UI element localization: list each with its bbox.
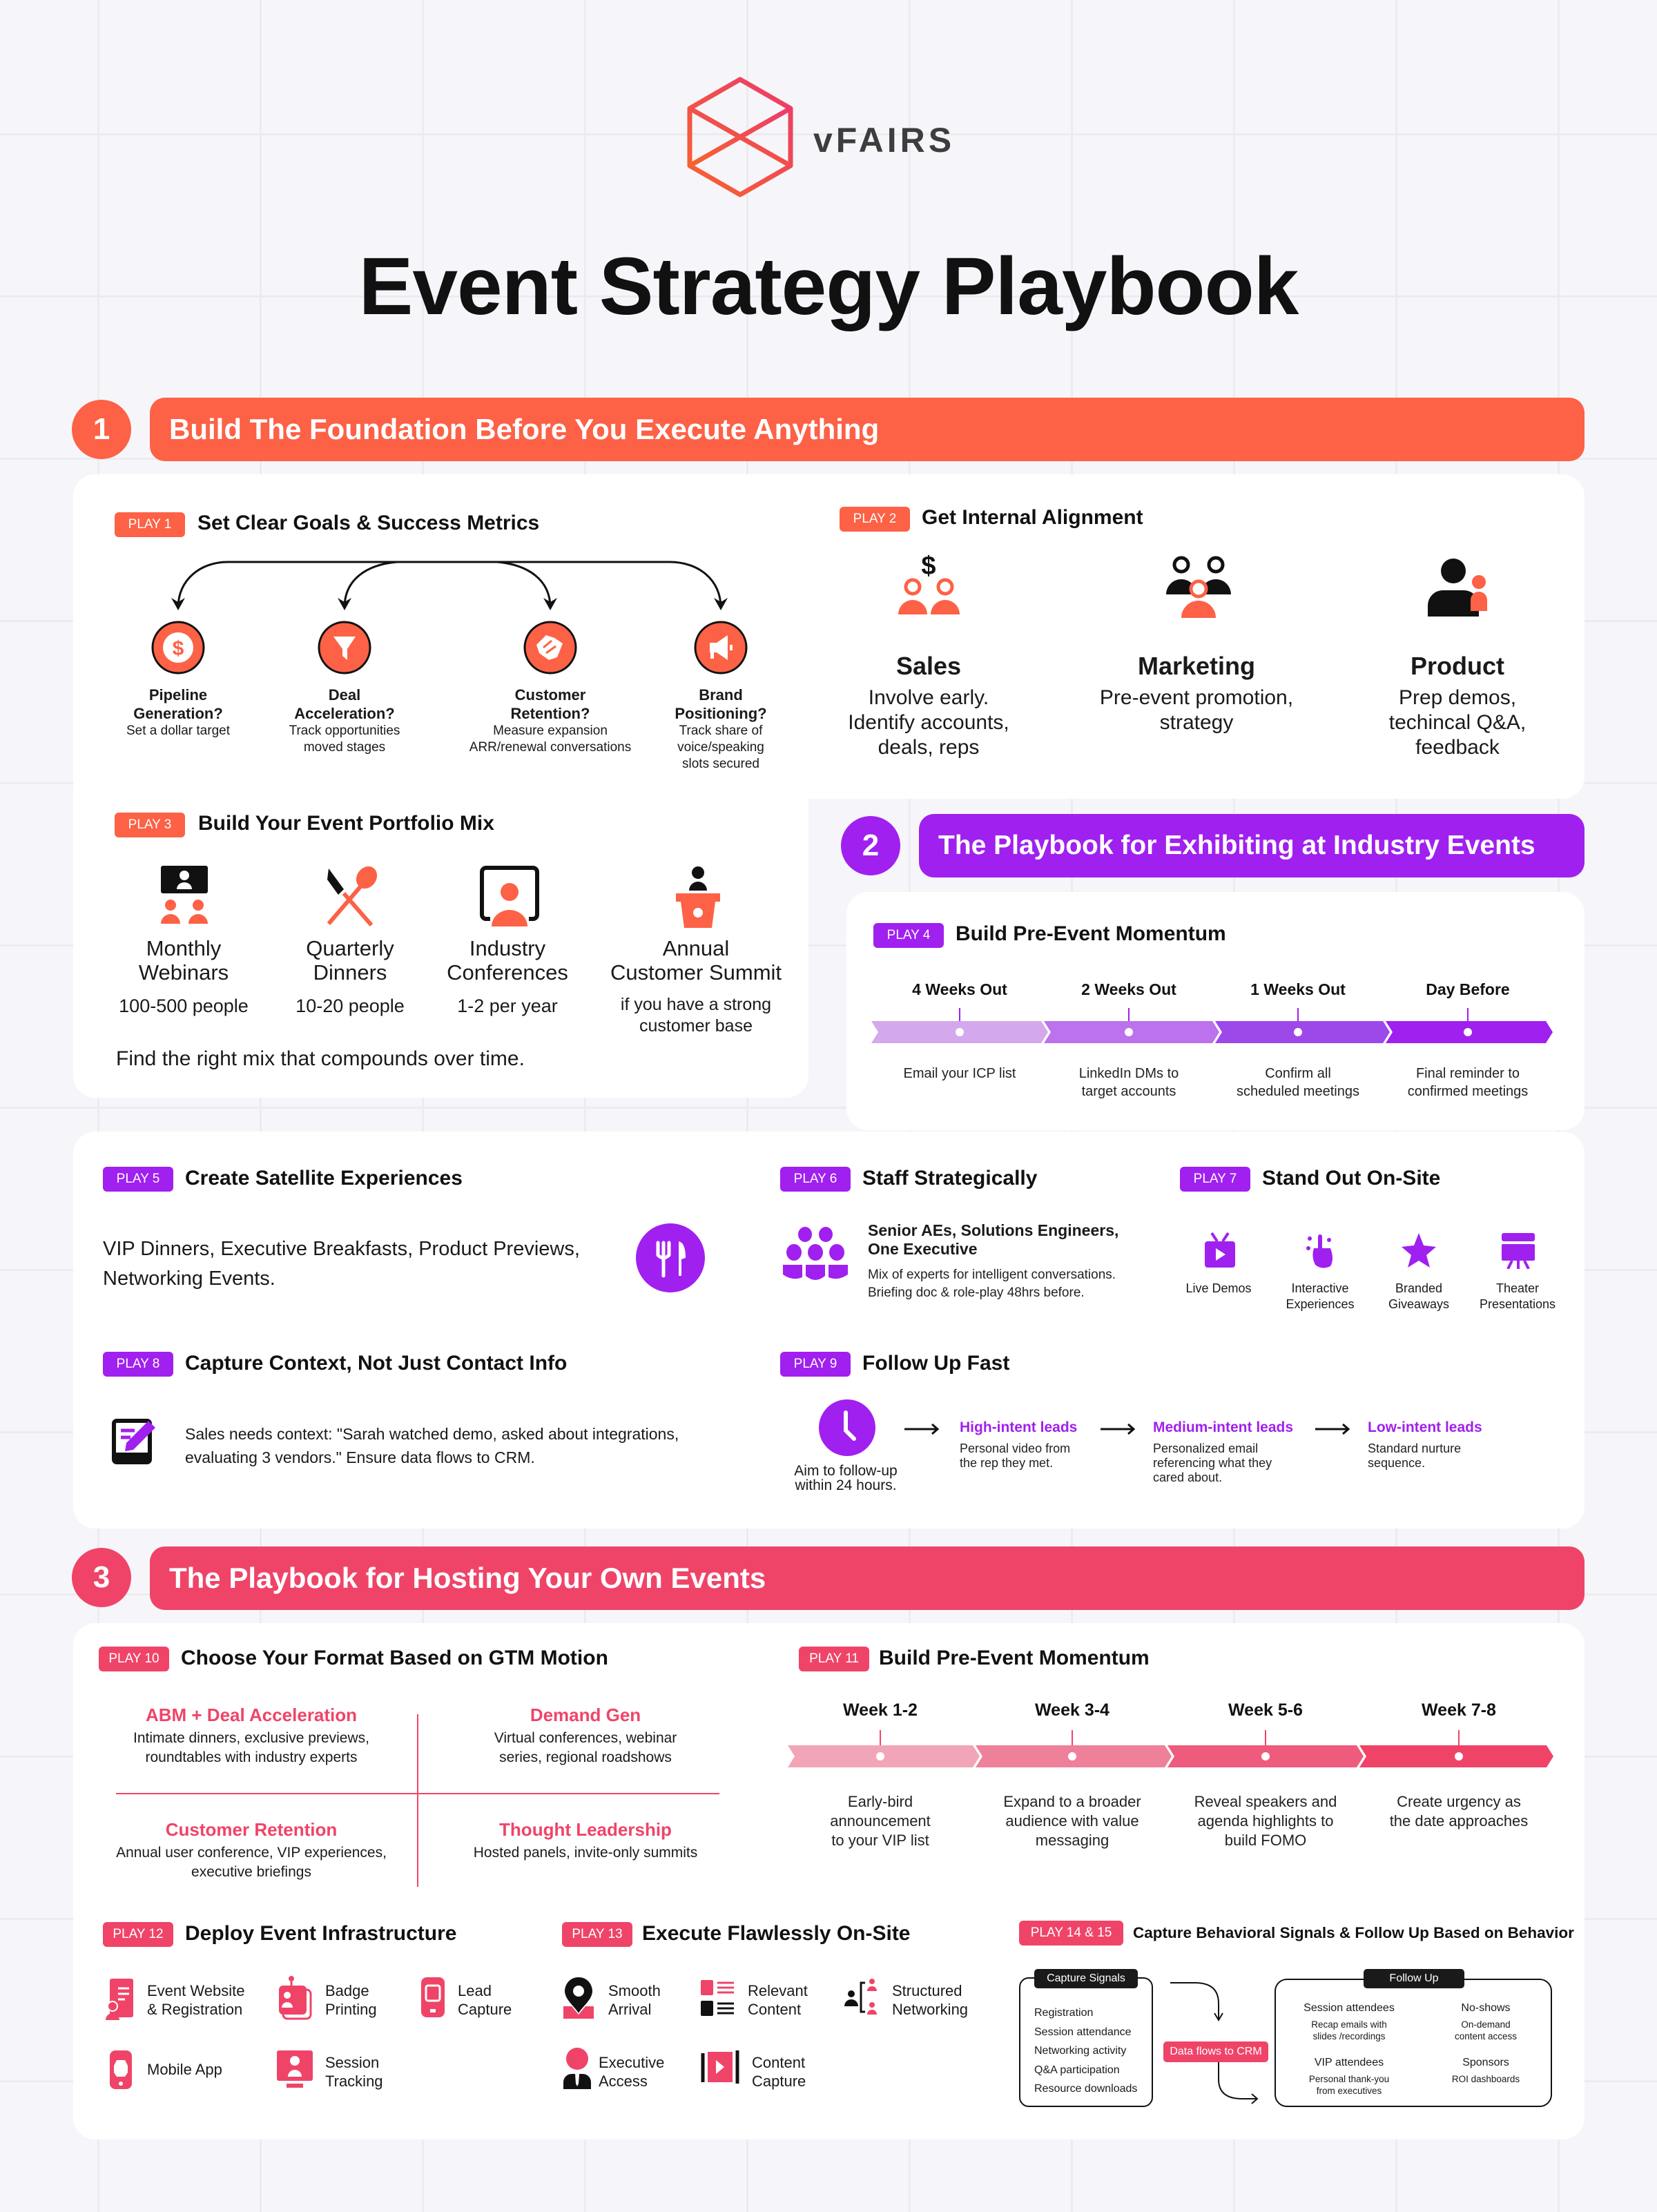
play 8: PLAY 8	[117, 1357, 159, 1371]
timeline: build FOMO	[1225, 1832, 1306, 1849]
capture signals box: Resource downloads	[1034, 2083, 1137, 2095]
play 7: Interactive	[1291, 1281, 1349, 1295]
follow up box: Personal thank-you	[1309, 2074, 1389, 2084]
follow up box: from executives	[1317, 2086, 1382, 2096]
section 3 header: The Playbook for Hosting Your Own Events	[169, 1562, 766, 1594]
play 3: 10-20 people	[295, 996, 405, 1016]
mix note: Find the right mix that compounds over time.	[116, 1047, 525, 1070]
play 10: executive briefings	[191, 1864, 311, 1880]
play 7: Theater	[1496, 1281, 1539, 1295]
play 10: Annual user conference, VIP experiences,	[116, 1845, 387, 1861]
icon: interactive	[1306, 1234, 1333, 1268]
goal labels	[126, 686, 230, 738]
play 11: PLAY 11	[809, 1651, 859, 1666]
play 7: Live Demos	[1185, 1281, 1252, 1295]
icon: star	[1402, 1233, 1436, 1268]
timeline: 1 Weeks Out	[1250, 980, 1346, 998]
timeline: 4 Weeks Out	[912, 980, 1007, 998]
follow up box: No-shows	[1461, 2002, 1511, 2014]
icon: badge	[276, 1975, 313, 2020]
play 13: Arrival	[608, 2001, 651, 2018]
play 9: Personalized email	[1153, 1442, 1258, 1455]
data flow arrows	[1161, 1976, 1278, 2107]
play 10: ABM + Deal Acceleration	[146, 1705, 357, 1725]
icon: location	[562, 1976, 595, 2020]
icon: lead capture	[419, 1976, 447, 2019]
section 3 header	[72, 1546, 1585, 1610]
play 12: Capture	[458, 2001, 512, 2018]
sales text: deals, reps	[878, 736, 979, 759]
marketing text: Marketing	[1138, 652, 1255, 680]
play 9: referencing what they	[1153, 1456, 1272, 1470]
play 9: Medium-intent leads	[1153, 1419, 1293, 1435]
play 13: Relevant	[748, 1982, 808, 1999]
play 14 & 15	[1019, 1921, 1571, 2135]
icon: team	[783, 1227, 848, 1280]
play 3: Build Your Event Portfolio Mix	[198, 812, 494, 835]
play 5: PLAY 5	[117, 1172, 159, 1186]
capture signals box: Capture Signals	[1047, 1972, 1125, 1984]
panel: play 4: PLAY 4	[887, 928, 930, 942]
play 12: Deploy Event Infrastructure	[185, 1922, 456, 1945]
icon: clock	[819, 1399, 875, 1456]
play 5: Networking Events.	[103, 1268, 275, 1290]
icon: product	[1428, 559, 1487, 617]
play 7: Stand Out On-Site	[1262, 1167, 1440, 1190]
timeline: Expand to a broader	[1003, 1793, 1141, 1810]
timeline: Week 3-4	[1035, 1700, 1109, 1720]
play 12: Tracking	[325, 2073, 383, 2090]
play 1: Positioning?	[675, 705, 767, 722]
play 1	[115, 512, 767, 771]
play 1: Retention?	[511, 705, 590, 722]
panel: play 4: Build Pre-Event Momentum	[956, 922, 1226, 945]
play 9: cared about.	[1153, 1471, 1222, 1484]
icon: handshake	[523, 621, 577, 674]
play 8: Sales needs context: "Sarah watched demo, asked about integrations,	[185, 1425, 679, 1443]
panel: play 4	[846, 892, 1585, 1130]
play 12: Printing	[325, 2001, 377, 2018]
timeline	[871, 980, 1553, 1099]
timeline: audience with value	[1005, 1812, 1139, 1830]
section 1 header: Build The Foundation Before You Execute Anything	[169, 413, 879, 445]
play 9	[780, 1352, 1482, 1493]
icon: funnel	[318, 621, 371, 674]
play 10: Intimate dinners, exclusive previews,	[133, 1730, 369, 1746]
play 13: Execute Flawlessly On-Site	[642, 1922, 910, 1945]
play 1: Track opportunities	[289, 724, 400, 738]
icon: executive	[562, 2046, 592, 2090]
play 3: if you have a strong	[621, 995, 771, 1014]
section 2 header: 2	[862, 828, 879, 862]
logo: vFAIRS	[813, 121, 955, 159]
play 3: customer base	[639, 1016, 753, 1036]
timeline: LinkedIn DMs to	[1079, 1066, 1179, 1081]
play 12: Event Website	[147, 1982, 244, 1999]
play 9: within 24 hours.	[795, 1477, 897, 1493]
play 13	[562, 1922, 1004, 2129]
arrows	[904, 1424, 1350, 1435]
play 10: series, regional roadshows	[499, 1749, 672, 1765]
icon: sales	[898, 552, 960, 614]
CRM tag	[1163, 2041, 1268, 2062]
section 2 header	[841, 814, 1585, 877]
timeline: target accounts	[1082, 1084, 1176, 1099]
section 3 header: 3	[93, 1560, 110, 1594]
play 13: Structured	[892, 1982, 962, 1999]
play 10: roundtables with industry experts	[145, 1749, 358, 1765]
play 5: Create Satellite Experiences	[185, 1167, 463, 1190]
play 7: Presentations	[1480, 1297, 1556, 1311]
icon: theater	[1502, 1233, 1535, 1269]
timeline: Create urgency as	[1397, 1793, 1521, 1810]
play 9: Low-intent leads	[1368, 1419, 1482, 1435]
play 14 & 15: Follow Up	[1389, 1972, 1439, 1984]
play 2: Get Internal Alignment	[922, 506, 1143, 529]
play 2: PLAY 2	[853, 512, 896, 526]
product text: Product	[1411, 652, 1504, 680]
play 13: Content	[748, 2001, 801, 2018]
play 9: Follow Up Fast	[862, 1352, 1009, 1375]
play 12: Badge	[325, 1982, 369, 1999]
play 10: Thought Leadership	[499, 1819, 672, 1840]
play 3: Industry	[469, 936, 545, 960]
timeline: confirmed meetings	[1408, 1084, 1528, 1099]
play 12	[103, 1922, 531, 2129]
play 1: Deal	[329, 686, 360, 704]
icon: conference	[480, 866, 539, 926]
timeline: Week 7-8	[1422, 1700, 1496, 1720]
timeline: Email your ICP list	[903, 1066, 1016, 1081]
play 5	[103, 1167, 705, 1292]
play 13: Content	[752, 2054, 805, 2071]
panel: exhibiting plays	[73, 1132, 1585, 1529]
play 10	[99, 1647, 719, 1887]
play 1: Customer	[515, 686, 585, 704]
portfolio labels: Webinars	[139, 960, 229, 984]
play 3: Dinners	[313, 960, 387, 984]
play 1: Track share of	[679, 724, 762, 738]
play 8	[103, 1352, 679, 1466]
icon: content list	[701, 1980, 735, 2016]
play 1: Set Clear Goals & Success Metrics	[197, 512, 539, 534]
icon: sales: $	[921, 552, 936, 581]
play 6: Staff Strategically	[862, 1167, 1037, 1190]
play 9: sequence.	[1368, 1456, 1425, 1470]
capture signals box: Session attendance	[1034, 2026, 1132, 2038]
follow up box: content access	[1455, 2031, 1517, 2041]
play 7: Experiences	[1286, 1297, 1355, 1311]
play 7: Branded	[1395, 1281, 1442, 1295]
play 13: Executive	[599, 2054, 664, 2071]
play 10: PLAY 10	[108, 1651, 159, 1666]
product text: Prep demos,	[1399, 686, 1516, 709]
play 5: VIP Dinners, Executive Breakfasts, Product Previews,	[103, 1238, 580, 1260]
icon: fork knife	[636, 1223, 705, 1292]
follow up box: Recap emails with	[1311, 2019, 1387, 2030]
icon: webinar	[161, 866, 208, 924]
sales text: Identify accounts,	[848, 711, 1009, 734]
play 9: Standard nurture	[1368, 1442, 1461, 1455]
follow up box: slides /recordings	[1312, 2031, 1386, 2041]
marketing text: strategy	[1160, 711, 1233, 734]
goal labels: Generation?	[133, 705, 223, 722]
play 9: Aim to follow-up	[794, 1463, 898, 1479]
follow up box: ROI dashboards	[1452, 2074, 1520, 2084]
section 1 header: 1	[93, 412, 110, 446]
play 13: Smooth	[608, 1982, 661, 1999]
timeline: 2 Weeks Out	[1081, 980, 1176, 998]
play 3: 1-2 per year	[457, 996, 558, 1016]
play 1: Measure expansion	[493, 724, 608, 738]
portfolio labels: 100-500 people	[119, 996, 249, 1016]
product text: techincal Q&A,	[1389, 711, 1526, 734]
portfolio labels	[119, 936, 249, 1016]
timeline: to your VIP list	[831, 1832, 929, 1849]
play 3: Annual	[663, 936, 729, 960]
play 1: ARR/renewal conversations	[469, 740, 631, 755]
section 1 header	[72, 398, 1585, 461]
icon: megaphone	[695, 621, 747, 674]
icon: notes	[112, 1419, 155, 1464]
icon: networking	[844, 1977, 880, 2017]
play 11: Build Pre-Event Momentum	[879, 1647, 1150, 1669]
play 13: PLAY 13	[572, 1927, 623, 1941]
play 1: PLAY 1	[128, 517, 171, 532]
play 10: Customer Retention	[166, 1819, 337, 1840]
timeline: agenda highlights to	[1198, 1812, 1333, 1830]
icon: website	[106, 1979, 136, 2020]
capture signals box: Registration	[1034, 2007, 1093, 2019]
play 6: Senior AEs, Solutions Engineers,	[868, 1221, 1118, 1239]
panel: hosting plays	[73, 1623, 1585, 2140]
play 6: PLAY 6	[794, 1172, 837, 1186]
timeline: Confirm all	[1265, 1066, 1331, 1081]
title: Event Strategy Playbook	[359, 241, 1298, 332]
timeline: the date approaches	[1390, 1812, 1528, 1830]
play 3: Quarterly	[306, 936, 394, 960]
icon: dinner	[327, 866, 377, 926]
play 7	[1180, 1167, 1556, 1311]
play 14 & 15: PLAY 14 & 15	[1031, 1925, 1112, 1940]
marketing text	[1100, 652, 1293, 734]
product text: feedback	[1415, 736, 1500, 759]
play 7: PLAY 7	[1194, 1172, 1237, 1186]
timeline: Week 1-2	[843, 1700, 918, 1720]
play 9: PLAY 9	[794, 1357, 837, 1371]
play 1: moved stages	[304, 740, 385, 755]
play 12: Lead	[458, 1982, 492, 1999]
timeline: Day Before	[1426, 980, 1510, 998]
logo	[688, 77, 955, 197]
follow up box	[1275, 1979, 1552, 2107]
play 1: slots secured	[682, 757, 759, 771]
follow up box: Sponsors	[1462, 2057, 1509, 2068]
play 12: & Registration	[147, 2001, 242, 2018]
play 10: Virtual conferences, webinar	[494, 1730, 677, 1746]
timeline: Reveal speakers and	[1194, 1793, 1337, 1810]
timeline: announcement	[830, 1812, 931, 1830]
play 13: Networking	[892, 2001, 968, 2018]
icon: content capture	[701, 2049, 739, 2085]
section 2 header: The Playbook for Exhibiting at Industry Events	[938, 831, 1535, 860]
play 1: Brand	[699, 686, 743, 704]
portfolio labels: Monthly	[146, 936, 221, 960]
follow up box: VIP attendees	[1315, 2057, 1384, 2068]
arrows	[171, 561, 728, 610]
play 3: Conferences	[447, 960, 568, 984]
play 6: One Executive	[868, 1240, 978, 1258]
capture signals box: Q&A participation	[1034, 2064, 1120, 2075]
product text	[1389, 652, 1526, 759]
play 6	[780, 1167, 1118, 1300]
play 10: Demand Gen	[530, 1705, 641, 1725]
play 8: evaluating 3 vendors." Ensure data flows to CRM.	[185, 1448, 535, 1466]
play 9: Personal video from	[960, 1442, 1070, 1455]
timeline: scheduled meetings	[1237, 1084, 1359, 1099]
icon: summit	[676, 866, 720, 928]
goal labels: Set a dollar target	[126, 724, 230, 738]
timeline: Week 5-6	[1228, 1700, 1303, 1720]
follow up box: Session attendees	[1304, 2002, 1395, 2014]
play 10: Hosted panels, invite-only summits	[474, 1845, 697, 1861]
play 3: Customer Summit	[610, 960, 782, 984]
play 3	[115, 812, 782, 1070]
play 10: Choose Your Format Based on GTM Motion	[181, 1647, 608, 1669]
icon: session tracking	[275, 2049, 314, 2090]
timeline	[788, 1647, 1561, 1874]
panels background	[73, 474, 1585, 799]
icon: marketing	[1166, 556, 1231, 618]
play 13: Access	[599, 2073, 648, 2090]
icon: dollar: $	[173, 637, 184, 660]
CRM tag: Data flows to CRM	[1170, 2046, 1262, 2057]
sales text: Sales	[896, 652, 961, 680]
play 12: Mobile App	[147, 2061, 222, 2078]
icon: dollar	[152, 621, 204, 674]
format grid	[99, 1647, 789, 1895]
play 8: Capture Context, Not Just Contact Info	[185, 1352, 567, 1375]
capture signals box: Networking activity	[1034, 2045, 1126, 2057]
timeline: Final reminder to	[1416, 1066, 1520, 1081]
play 13: Capture	[752, 2073, 806, 2090]
play 1: Acceleration?	[294, 705, 395, 722]
play 11	[788, 1647, 1561, 1874]
icon: live demo	[1205, 1232, 1235, 1268]
play 1: voice/speaking	[677, 740, 764, 755]
timeline: messaging	[1036, 1832, 1109, 1849]
play 6: Mix of experts for intelligent conversations.	[868, 1268, 1116, 1282]
sales text: Involve early.	[869, 686, 989, 709]
play 7: Giveaways	[1388, 1297, 1449, 1311]
timeline: Early-bird	[848, 1793, 913, 1810]
sales text	[848, 652, 1009, 759]
follow up box: On-demand	[1461, 2019, 1511, 2030]
play 14 & 15: Capture Behavioral Signals & Follow Up Based on Behavior	[1133, 1924, 1574, 1941]
play 3: PLAY 3	[128, 817, 171, 832]
play 2	[840, 506, 1526, 759]
play 9: the rep they met.	[960, 1456, 1053, 1470]
icon: mobile app	[108, 2049, 133, 2090]
play 6: Briefing doc & role-play 48hrs before.	[868, 1286, 1085, 1300]
play 12: Session	[325, 2054, 379, 2071]
play 12: PLAY 12	[113, 1927, 164, 1941]
marketing text: Pre-event promotion,	[1100, 686, 1293, 709]
play 9: High-intent leads	[960, 1419, 1077, 1435]
capture signals box	[1019, 1977, 1153, 2107]
goal labels: Pipeline	[149, 686, 207, 704]
